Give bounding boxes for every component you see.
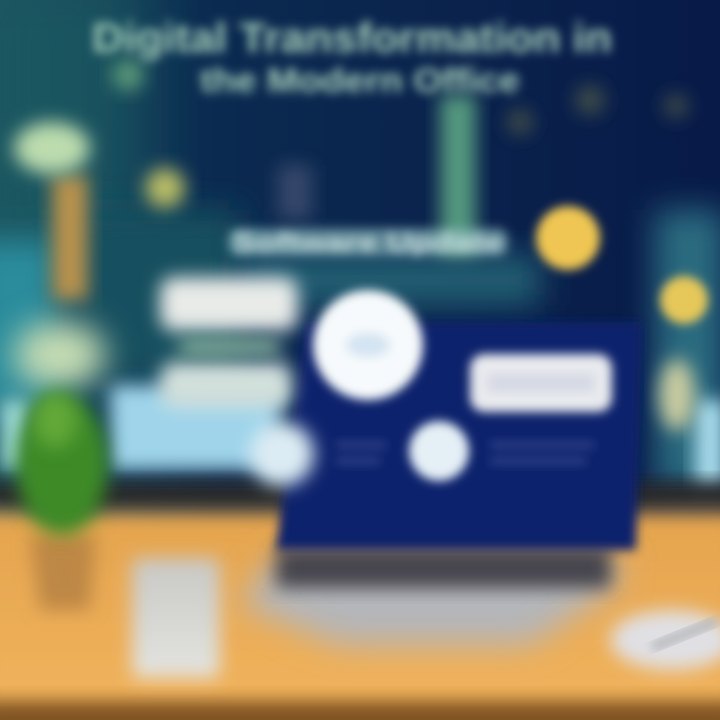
laptop hinge	[276, 548, 611, 588]
tower: central green	[440, 95, 476, 255]
text: screen caption left	[336, 442, 386, 464]
glow: green bulb	[112, 59, 144, 91]
card: top left	[160, 277, 298, 331]
glow: yellow bulb left	[145, 168, 185, 208]
tower: left orange	[52, 175, 88, 300]
title: Digital Transformation in	[92, 14, 612, 61]
title	[92, 14, 612, 100]
glow: left lower plant light	[14, 321, 106, 389]
node: large circle	[313, 290, 423, 400]
icon: yellow coin top	[536, 206, 600, 270]
card: right pill	[470, 354, 612, 412]
card: lower left	[160, 362, 292, 408]
desk edge	[0, 482, 720, 510]
tower: dim center	[278, 165, 312, 220]
icon: yellow coin right	[660, 276, 708, 324]
laptop	[240, 322, 642, 645]
connector between cards	[180, 337, 280, 357]
laptop base	[240, 560, 625, 645]
cup	[132, 558, 220, 678]
node: lower middle circle	[409, 421, 469, 481]
plant	[16, 392, 108, 610]
glow: upper left light	[14, 122, 90, 174]
plant highlight	[33, 392, 77, 448]
mouse	[610, 610, 720, 670]
lamp: right lower	[659, 359, 695, 431]
title: the Modern Office	[200, 62, 520, 100]
node: lower left circle	[250, 422, 314, 486]
desk	[0, 512, 720, 720]
plant pot	[30, 535, 96, 610]
subtitle band: Software Update	[233, 227, 503, 257]
text: screen caption right	[490, 442, 594, 464]
plant leaves	[16, 395, 108, 535]
pill text	[488, 374, 594, 392]
glow: dim dots	[507, 85, 688, 135]
laptop screen	[276, 322, 642, 550]
